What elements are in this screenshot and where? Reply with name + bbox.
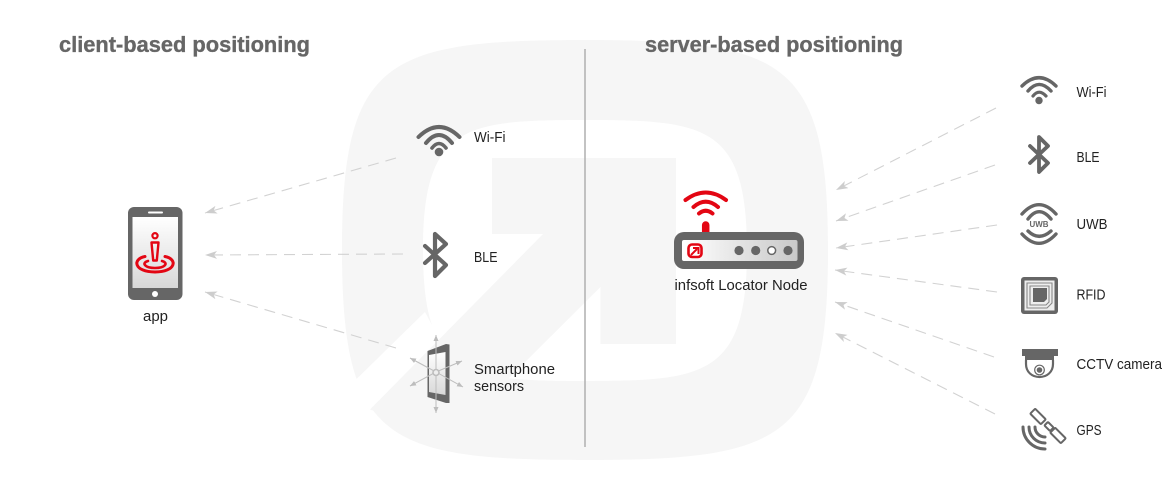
- background logo watermark: [335, 40, 828, 460]
- red Wi-Fi signal: [686, 192, 726, 234]
- divider: [584, 49, 586, 447]
- arrow: RFID to node: [835, 270, 997, 292]
- arrow: Wi-Fi to app: [205, 158, 396, 213]
- icon: smartphone sensors: [410, 335, 463, 413]
- icon: CCTV camera: [1022, 349, 1058, 377]
- label: infsoft Locator Node: infsoft Locator Node: [674, 278, 808, 294]
- label: Smartphone sensors: [474, 362, 555, 395]
- arrow: sensors to app: [205, 292, 396, 348]
- label: app: app: [143, 309, 168, 325]
- label: Wi-Fi client: Wi-Fi: [474, 130, 506, 146]
- icon: red location marker: [137, 233, 173, 272]
- label: Smartphone sensors: sensors: [474, 379, 524, 395]
- arrow: Wi-Fi to node: [836, 108, 996, 190]
- icon: UWB: UWB: [1030, 220, 1049, 229]
- label: Wi-Fi server: Wi-Fi: [1076, 85, 1106, 101]
- icon: Wi-Fi server: [1022, 78, 1056, 104]
- icon: infsoft Locator Node router: [674, 192, 804, 269]
- icon: app smartphone: [128, 207, 182, 300]
- label: Smartphone sensors: Smartphone: [474, 362, 555, 378]
- label: BLE server: BLE: [1076, 150, 1100, 166]
- label: RFID: RFID: [1076, 288, 1106, 304]
- label: GPS: GPS: [1076, 423, 1102, 439]
- label: BLE client: BLE: [474, 250, 498, 266]
- icon: GPS satellite: [1023, 409, 1066, 449]
- icon: BLE client: [425, 234, 446, 276]
- arrow: BLE to app: [205, 254, 403, 255]
- arrow: BLE to node: [836, 165, 995, 221]
- icon: BLE server: [1030, 137, 1048, 172]
- label: UWB: UWB: [1076, 217, 1108, 233]
- title: client-based positioning: client-based positioning: [59, 32, 310, 57]
- icon: RFID: [1021, 277, 1058, 314]
- title: server-based positioning: server-based positioning: [645, 32, 903, 57]
- arrow: UWB to node: [836, 225, 997, 248]
- arrow: CCTV to node: [835, 302, 994, 357]
- label: CCTV camera: CCTV camera: [1076, 357, 1163, 373]
- icon: UWB: [1022, 205, 1056, 243]
- icon: Wi-Fi client: [418, 127, 460, 156]
- arrow: GPS to node: [835, 333, 995, 414]
- red infsoft logo: [688, 244, 702, 257]
